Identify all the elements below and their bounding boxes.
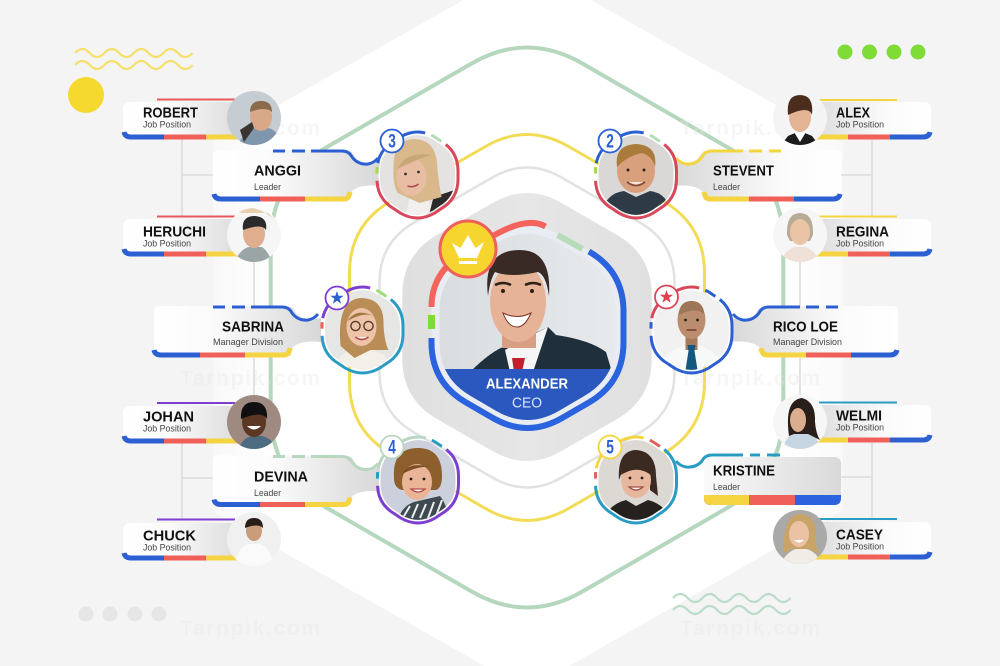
panel: Chuck member card	[123, 512, 281, 566]
CEO ring: light green dash	[558, 235, 582, 249]
panel: Heruchi member card: HERUCHI	[143, 224, 206, 240]
panel: Sabrina manager card: Manager Division	[213, 337, 283, 348]
CEO ring: coral segment	[432, 223, 546, 307]
panel: Johan member card: Job Position	[143, 424, 191, 434]
panel: Casey member card	[773, 510, 931, 564]
panel: Stevent leader card	[674, 150, 841, 200]
decoration: green dots	[838, 44, 926, 60]
panel: Rico Loe manager card	[731, 306, 898, 356]
panel: Welmi member card: WELMI	[836, 408, 882, 424]
panel: Anggi leader card: Leader	[254, 182, 281, 193]
panel: Chuck member card: CHUCK	[143, 528, 196, 544]
avatar: Welmi	[773, 395, 827, 449]
panel: Regina member card	[773, 208, 931, 262]
decoration: grey dots	[78, 606, 166, 622]
CEO ring: bright green tick	[428, 315, 435, 329]
node: Anggi portrait, number 3: 3	[388, 130, 396, 152]
avatar: Johan	[227, 395, 281, 449]
watermarks: Tarnpik.com	[680, 367, 820, 390]
node: Kristine portrait, number 5	[596, 435, 676, 525]
CEO ring: blue segment	[432, 252, 624, 428]
CEO photo	[440, 234, 611, 420]
panel: Kristine leader card	[676, 455, 841, 505]
decoration: yellow circle	[68, 77, 104, 113]
node: Anggi portrait, number 3	[377, 130, 458, 220]
icon: crown badge	[440, 221, 496, 277]
panel: Johan member card	[123, 395, 281, 449]
CEO frame backing	[432, 226, 624, 428]
panel: Sabrina manager card: SABRINA	[222, 318, 284, 336]
panel: Kristine leader card: Leader	[713, 482, 740, 493]
panel: Welmi member card	[773, 395, 931, 449]
avatar: Robert	[227, 91, 282, 145]
panel: Devina leader card	[213, 456, 380, 506]
panel: Casey member card: CASEY	[836, 526, 883, 544]
panel: Johan member card: JOHAN	[143, 408, 194, 426]
node: Devina portrait, number 4	[378, 435, 458, 525]
tree connector lines	[182, 139, 872, 520]
white hexagon backdrop	[213, 0, 843, 666]
panel: Welmi member card: Job Position	[836, 422, 884, 434]
panel: Kristine leader card: KRISTINE	[713, 462, 775, 480]
panel: Anggi leader card	[213, 150, 380, 200]
avatar: Chuck	[227, 512, 281, 560]
panel: Anggi leader card: ANGGI	[254, 162, 301, 180]
panel: Casey member card: Job Position	[836, 542, 884, 552]
watermarks: Tarnpik.com	[680, 117, 820, 140]
panel: central grey hexagon	[402, 193, 652, 461]
panel: Stevent leader card: Leader	[713, 182, 740, 193]
panel: Alex member card	[773, 91, 931, 145]
yellow hexagon ring	[350, 134, 704, 520]
node: Stevent portrait, number 2: 2	[606, 130, 614, 152]
panel: Devina leader card: Leader	[254, 488, 281, 499]
watermarks: Tarnpik.com	[180, 617, 320, 640]
grey hexagon ring	[380, 168, 674, 488]
avatar: Casey	[773, 510, 827, 564]
panel: Heruchi member card: Job Position	[143, 238, 191, 250]
panel: Stevent leader card: STEVENT	[713, 162, 774, 180]
decoration: yellow waves	[75, 49, 193, 69]
panel: Regina member card: Job Position	[836, 238, 884, 250]
node: Rico Loe portrait, star	[651, 285, 732, 375]
CEO name: ALEXANDER	[486, 376, 568, 392]
panel: CEO Alexander	[430, 220, 630, 440]
decoration: green waves	[673, 594, 791, 614]
panel: Chuck member card: Job Position	[143, 542, 191, 554]
avatar: Alex	[773, 91, 827, 145]
panel: Regina member card: REGINA	[836, 224, 889, 240]
avatar: Heruchi	[227, 208, 281, 262]
panel: Robert member card: Job Position	[143, 120, 191, 130]
watermarks: Tarnpik.com	[180, 117, 320, 140]
panel: Rico Loe manager card: RICO LOE	[773, 318, 838, 336]
node: Kristine portrait, number 5: 5	[606, 436, 614, 458]
outer green hexagon ring	[271, 48, 783, 608]
panel: Alex member card: ALEX	[836, 104, 870, 122]
avatar: Regina	[773, 208, 827, 262]
watermarks: Tarnpik.com	[680, 617, 820, 640]
watermarks	[180, 117, 820, 640]
panel: Alex member card: Job Position	[836, 120, 884, 130]
panel: Robert member card	[123, 91, 282, 145]
node: Sabrina portrait, star	[322, 285, 403, 375]
node: Stevent portrait, number 2	[596, 130, 676, 220]
CEO title: CEO	[512, 394, 542, 412]
watermarks: Tarnpik.com	[180, 367, 320, 390]
panel: Heruchi member card	[123, 208, 281, 262]
panel: Devina leader card: DEVINA	[254, 468, 308, 486]
panel: Robert member card: ROBERT	[143, 104, 198, 122]
panel: Rico Loe manager card: Manager Division	[773, 337, 842, 348]
panel: Sabrina manager card	[154, 306, 321, 356]
node: Devina portrait, number 4: 4	[388, 436, 396, 458]
